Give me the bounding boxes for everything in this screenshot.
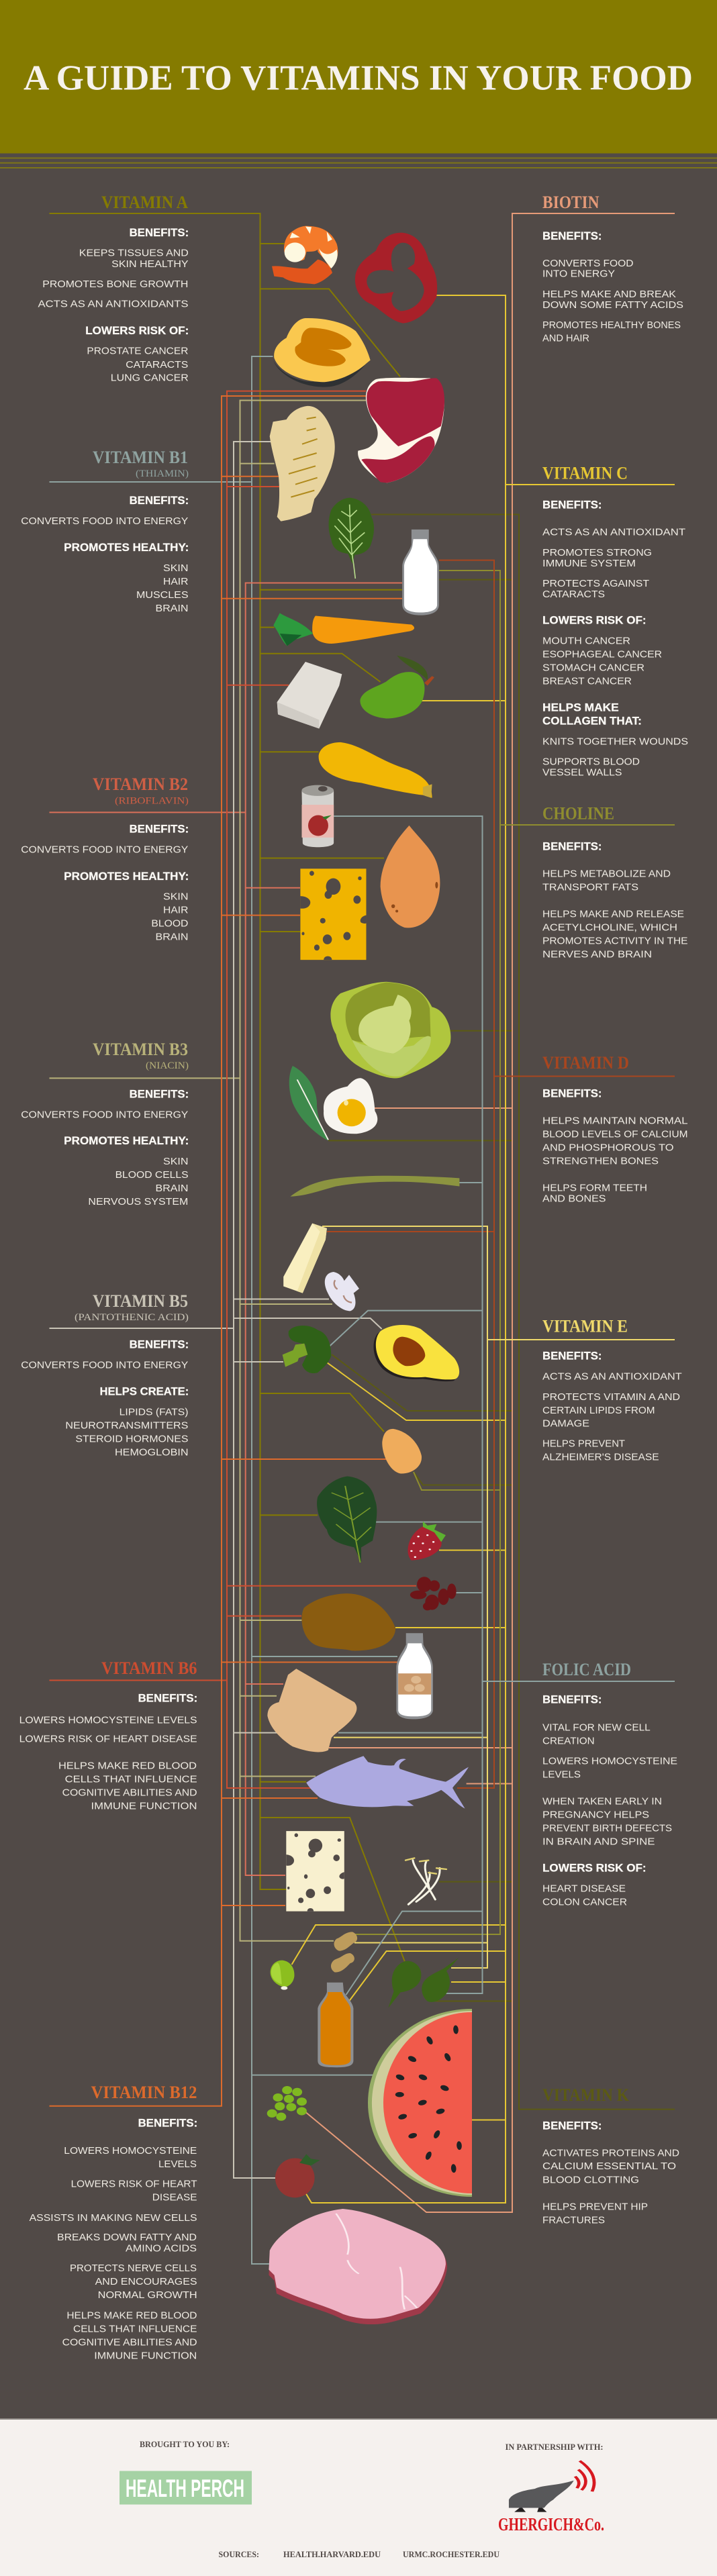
icon: whole grain toast [267,1669,356,1752]
icon group: sprouts, lime, peanuts, spinach [271,1858,459,2008]
text: vitamin K details [542,2120,679,2226]
icon: sweet potato [381,826,440,928]
icon: dark leafy greens [317,1476,377,1563]
text: biotin details: DOWN SOME FATTY ACIDS [542,299,683,311]
text: vitamin B12 details: PROTECTS NERVE CELLS [70,2263,197,2274]
icon group: foods zoom band six [269,2154,447,2324]
text: vitamin B2 details: BRAIN [156,932,188,943]
text: vitamin D details: BLOOD LEVELS OF CALCIUM [542,1129,687,1140]
text: vitamin E details: ALZHEIMER'S DISEASE [542,1452,659,1463]
text: vitamin B6 details: LOWERS HOMOCYSTEINE LEVELS [19,1714,197,1726]
text: vitamin K details: CALCIUM ESSENTIAL TO [542,2161,676,2172]
text: folic acid details: PREVENT BIRTH DEFECTS [542,1823,672,1834]
text: vitamin A details: CATARACTS [126,359,188,370]
text: folic acid details: PREGNANCY HELPS [542,1810,649,1820]
text: folic acid details: HEART DISEASE [542,1883,626,1894]
text: vitamin B6 details: CELLS THAT INFLUENCE [65,1774,197,1785]
text: vitamin E details: HELPS PREVENT [542,1438,625,1450]
sources [219,2549,500,2559]
text: vitamin B1 details [21,494,189,614]
icon: tomato [275,2154,320,2197]
text: vitamin D details: AND PHOSPHOROUS TO [542,1142,674,1153]
text: vitamin B3 details: BENEFITS: [130,1088,189,1101]
text: vitamin B12 details: LOWERS HOMOCYSTEINE [64,2145,197,2157]
text: vitamin B6 details: COGNITIVE ABILITIES AND [62,1787,197,1799]
text: vitamin B3 details: PROMOTES HEALTHY: [64,1134,189,1147]
text: folic acid details: LEVELS [542,1769,581,1780]
text: vitamin B12 details: AMINO ACIDS [126,2243,197,2254]
text: folic acid details: LOWERS HOMOCYSTEINE [542,1756,677,1767]
text: choline details: TRANSPORT FATS [542,882,638,893]
text: vitamin K details: BLOOD CLOTTING [542,2175,639,2185]
icon: acorn squash [273,318,371,387]
heading: vitamin B1: VITAMIN B1 [93,448,188,467]
text: vitamin B5 details: LIPIDS (FATS) [120,1407,188,1418]
icon: yellow cheese [300,869,366,960]
icon group: foods zoom band three [283,826,459,1293]
icon: watermelon [368,2009,472,2197]
text: folic acid details: COLON CANCER [542,1897,627,1908]
panel: vitamin B1 [21,448,189,614]
text: vitamin B3 details: BLOOD CELLS [115,1169,189,1181]
logo: ghergich elephant [498,2461,604,2534]
icon group: meat, chicken, spinach [270,378,444,579]
connector lines: biotin [306,213,675,2212]
text: vitamin B12 details: HELPS MAKE RED BLOOD [66,2310,197,2321]
text: vitamin B5 details: HELPS CREATE: [99,1385,189,1397]
subheading: niacin: (NIACIN) [146,1060,189,1071]
text: vitamin C details: COLLAGEN THAT: [542,715,642,728]
panel: vitamin B3 [21,1040,189,1207]
text: vitamin B2 details: BLOOD [151,918,188,930]
text: biotin details: INTO ENERGY [542,268,615,280]
text: vitamin B6 details: LOWERS RISK OF HEART DISEASE [19,1734,197,1745]
text: biotin details: BENEFITS: [542,230,602,242]
sources: URMC.ROCHESTER.EDU [403,2549,500,2559]
text: vitamin B12 details: CELLS THAT INFLUENCE [73,2323,197,2334]
text: vitamin B5 details: NEUROTRANSMITTERS [65,1420,188,1431]
text: vitamin B3 details: SKIN [163,1156,188,1167]
text: folic acid details: IN BRAIN AND SPINE [542,1836,655,1847]
text: vitamin D details: STRENGTHEN BONES [542,1156,659,1167]
icon: peanuts [331,1932,357,1972]
connector lines: vitamin B1 [50,356,397,2264]
text: vitamin E details: CERTAIN LIPIDS FROM [542,1405,655,1416]
icon: shrimp [272,226,338,284]
panel: vitamin C [542,463,688,779]
text: vitamin B5 details: HEMOGLOBIN [115,1447,189,1458]
text: vitamin K details: BENEFITS: [542,2120,602,2132]
text: vitamin B3 details: BRAIN [156,1183,188,1194]
connector lines: vitamin B3 [50,400,366,1941]
icon: almond-shaped egg [382,1429,422,1473]
heading: folic acid: FOLIC ACID [542,1660,631,1679]
panel: vitamin K [542,2085,679,2226]
logo: ghergich elephant: GHERGICH&Co. [498,2514,604,2534]
icon: kidney beans [410,1577,457,1610]
logo: health perch [120,2471,252,2505]
icon: ham [269,2209,447,2324]
text: vitamin B12 details: AND ENCOURAGES [95,2276,197,2287]
text: vitamin B1 details: BENEFITS: [130,494,189,507]
text: vitamin B1 details: MUSCLES [136,589,189,601]
panel: folic acid [542,1660,677,1908]
text: biotin details: AND HAIR [542,333,589,344]
heading: vitamin C: VITAMIN C [542,463,628,483]
panel: vitamin B12 [30,2083,197,2361]
heading: vitamin K: VITAMIN K [542,2085,630,2105]
text: choline details: HELPS MAKE AND RELEASE [542,909,684,920]
text: vitamin B5 details: STEROID HORMONES [75,1433,188,1444]
text: folic acid details: WHEN TAKEN EARLY IN [542,1796,662,1807]
icon group: shrimp, pepper, squash [272,226,437,387]
icon group: foods zoom band five [267,1756,469,2121]
text: vitamin B2 details [21,823,189,943]
text: vitamin A details: KEEPS TISSUES AND [79,248,189,259]
subheading: thiamin: (THIAMIN) [136,468,189,479]
text: biotin details [542,230,683,344]
text: folic acid details [542,1693,677,1908]
icon: red meat [358,378,444,483]
text: vitamin B1 details: CONVERTS FOOD INTO ENERGY [21,515,188,527]
text: vitamin B1 details: HAIR [163,576,189,587]
panel: vitamin D [542,1053,687,1205]
icon: mushroom [325,1272,359,1311]
text: vitamin B5 details: BENEFITS: [130,1338,189,1351]
credit: brought to you by: BROUGHT TO YOU BY: [140,2439,230,2449]
icon: tuna fish [306,1756,469,1809]
text: vitamin C details: HELPS MAKE [542,701,619,714]
text: vitamin A details: BENEFITS: [130,226,189,239]
connector lines: vitamin K [328,514,675,2110]
logo: health perch: HEALTH PERCH [126,2475,244,2502]
text: vitamin C details: PROTECTS AGAINST [542,578,649,589]
panel: vitamin E [542,1317,682,1463]
heading: vitamin B6: VITAMIN B6 [101,1658,197,1678]
heading: choline: CHOLINE [542,804,614,824]
text: vitamin B2 details: HAIR [163,905,189,916]
text: vitamin A details [38,226,189,384]
icon: grilled chicken [270,406,335,522]
heading: vitamin E: VITAMIN E [542,1317,628,1336]
icon: tofu [277,662,342,729]
icon: spinach leaves [388,1958,459,2008]
connector lines: vitamin B12 [50,396,402,2106]
panel: choline [542,804,687,960]
text: vitamin C details: BREAST CANCER [542,676,632,687]
icon: asparagus [290,1176,459,1197]
text: vitamin B2 details: CONVERTS FOOD INTO ENERGY [21,844,188,855]
text: vitamin B2 details: PROMOTES HEALTHY: [64,870,189,883]
text: vitamin K details: HELPS PREVENT HIP [542,2201,648,2212]
text: vitamin C details: BENEFITS: [542,499,602,511]
sources: SOURCES: [219,2549,259,2559]
icon: kale leaf [289,1066,328,1140]
panel: vitamin B2 [21,775,189,943]
header banner [0,0,717,168]
text: vitamin K details: ACTIVATES PROTEINS AND [542,2148,679,2159]
subheading: pantothenic acid: (PANTOTHENIC ACID) [75,1312,189,1323]
text: vitamin B3 details [21,1088,189,1207]
text: vitamin D details: HELPS MAINTAIN NORMAL [542,1116,687,1126]
text: folic acid details: CREATION [542,1736,595,1747]
sources: HEALTH.HARVARD.EDU [283,2549,381,2559]
text: vitamin C details [542,499,688,779]
text: vitamin C details: VESSEL WALLS [542,766,622,779]
icon: red bell pepper [355,233,437,324]
text: biotin details: HELPS MAKE AND BREAK [542,289,676,300]
icon: lime [271,1961,294,1990]
text: biotin details: CONVERTS FOOD [542,258,634,269]
text: vitamin B6 details [19,1691,197,1812]
connector lines: vitamin D [327,560,675,1788]
text: vitamin C details: CATARACTS [542,589,605,600]
text: vitamin D details: HELPS FORM TEETH [542,1183,647,1193]
text: vitamin B12 details: LEVELS [158,2159,197,2170]
panel: vitamin A [38,193,189,384]
text: vitamin B5 details [21,1338,189,1458]
text: choline details: ACETYLCHOLINE, WHICH [542,922,677,934]
text: choline details: HELPS METABOLIZE AND [542,869,671,880]
text: choline details: NERVES AND BRAIN [542,949,652,960]
text: vitamin B1 details: SKIN [163,562,188,574]
text: vitamin A details: LOWERS RISK OF: [85,324,189,337]
text: vitamin E details: ACTS AS AN ANTIOXIDANT [542,1371,682,1383]
heading: vitamin B2: VITAMIN B2 [93,775,188,794]
text: vitamin C details: KNITS TOGETHER WOUNDS [542,736,688,747]
text: vitamin B12 details: BENEFITS: [138,2117,197,2129]
text: vitamin E details [542,1349,682,1463]
icon: mango [360,656,434,718]
icon: milk bottle [402,530,439,615]
text: vitamin C details: ESOPHAGEAL CANCER [542,649,662,660]
text: choline details: PROMOTES ACTIVITY IN THE [542,936,687,947]
heading: vitamin D: VITAMIN D [542,1053,629,1073]
connector lines: vitamin B6 [50,391,416,1788]
panel: biotin [542,193,683,344]
icon: yellow squash [319,742,432,798]
icon: butter [283,1224,327,1293]
text: biotin details: PROMOTES HEALTHY BONES [542,319,681,331]
text: vitamin B12 details: DISEASE [152,2192,197,2203]
icon: pale swiss cheese [286,1831,344,1912]
text: vitamin K details: FRACTURES [542,2215,605,2226]
text: vitamin B2 details: BENEFITS: [130,823,189,836]
text: vitamin C details: STOMACH CANCER [542,662,644,674]
heading: vitamin B12: VITAMIN B12 [91,2083,197,2102]
connector lines: folic acid [329,816,675,1995]
icon group: mushroom, broccoli, avocado [283,1272,459,1381]
text: vitamin D details: AND BONES [542,1193,606,1205]
text: vitamin A details: PROMOTES BONE GROWTH [42,279,188,290]
connector lines: vitamin C [291,295,675,2203]
icon: bean sprouts [405,1858,446,1904]
text: vitamin C details: SUPPORTS BLOOD [542,756,640,768]
heading: vitamin B5: VITAMIN B5 [93,1291,188,1311]
text: folic acid details: LOWERS RISK OF: [542,1862,647,1874]
text: vitamin B3 details: NERVOUS SYSTEM [88,1196,188,1207]
text: choline details: BENEFITS: [542,840,602,852]
credit: in partnership with: IN PARTNERSHIP WITH: [505,2442,603,2452]
text: vitamin B2 details: SKIN [163,891,188,903]
text: vitamin B1 details: BRAIN [156,603,188,614]
text: vitamin B12 details [30,2117,197,2361]
text: vitamin A details: ACTS AS AN ANTIOXIDANTS [38,299,188,310]
panel: vitamin B6 [19,1658,197,1812]
text: vitamin B1 details: PROMOTES HEALTHY: [64,541,189,554]
icon: canned tomato [301,785,334,847]
text: vitamin A details: LUNG CANCER [111,373,189,384]
text: vitamin D details: BENEFITS: [542,1087,602,1099]
text: vitamin C details: MOUTH CANCER [542,636,630,647]
text: vitamin C details: LOWERS RISK OF: [542,613,647,627]
text: folic acid details: VITAL FOR NEW CELL [542,1722,651,1734]
text: vitamin C details: ACTS AS AN ANTIOXIDANT [542,527,685,538]
text: vitamin B12 details: NORMAL GROWTH [98,2289,197,2301]
text: vitamin B12 details: IMMUNE FUNCTION [94,2350,197,2361]
icon: broccoli [283,1326,331,1373]
text: vitamin E details: DAMAGE [542,1418,589,1430]
icon: green peas [267,2086,307,2121]
icon: cabbage [330,982,450,1078]
heading: vitamin A: VITAMIN A [101,193,188,212]
title: A GUIDE TO VITAMINS IN YOUR FOOD [23,59,693,98]
text: vitamin E details: BENEFITS: [542,1349,602,1363]
text: vitamin D details [542,1087,687,1205]
text: vitamin B12 details: BREAKS DOWN FATTY AND [57,2232,197,2243]
text: vitamin C details: PROMOTES STRONG [542,547,652,558]
text: vitamin E details: PROTECTS VITAMIN A AND [542,1391,680,1403]
icon: carrot [273,613,414,646]
connector lines: vitamin B5 [50,442,382,2178]
icon: spinach leaf [329,498,374,579]
connector lines: choline [352,571,675,1934]
text: vitamin B3 details: CONVERTS FOOD INTO ENERGY [21,1109,188,1120]
text: vitamin A details: SKIN HEALTHY [111,258,189,270]
icon: orange juice bottle [318,1983,353,2067]
text: vitamin B12 details: LOWERS RISK OF HEART [71,2179,197,2190]
connector lines: vitamin E [322,1226,675,1968]
text: vitamin B12 details: ASSISTS IN MAKING NEW CELLS [30,2212,197,2224]
subheading: riboflavin: (RIBOFLAVIN) [115,796,189,807]
text: choline details [542,840,687,960]
text: vitamin B12 details: COGNITIVE ABILITIES AND [62,2336,197,2348]
icon: fried egg [324,1078,377,1134]
connector lines: vitamin A [50,213,405,1961]
text: vitamin B6 details: HELPS MAKE RED BLOOD [58,1761,197,1772]
icon: avocado [373,1325,459,1381]
text: vitamin B6 details: IMMUNE FUNCTION [91,1801,197,1812]
panel: footer [0,2418,717,2576]
panel: vitamin B5 [21,1291,189,1458]
icon: strawberry [408,1522,446,1561]
text: vitamin A details: PROSTATE CANCER [87,346,188,357]
text: vitamin C details: IMMUNE SYSTEM [542,558,636,569]
icon: soy milk bottle [396,1633,433,1719]
icon group: foods zoom band two [273,530,439,847]
icon: liver [301,1593,395,1650]
icon group: foods zoom band four [267,1429,457,1752]
heading: vitamin B3: VITAMIN B3 [93,1040,188,1059]
connector lines: vitamin B2 [50,583,402,1875]
heading: biotin: BIOTIN [542,193,600,212]
text: vitamin B5 details: CONVERTS FOOD INTO ENERGY [21,1360,188,1371]
text: folic acid details: BENEFITS: [542,1693,602,1706]
text: vitamin B6 details: BENEFITS: [138,1691,197,1705]
